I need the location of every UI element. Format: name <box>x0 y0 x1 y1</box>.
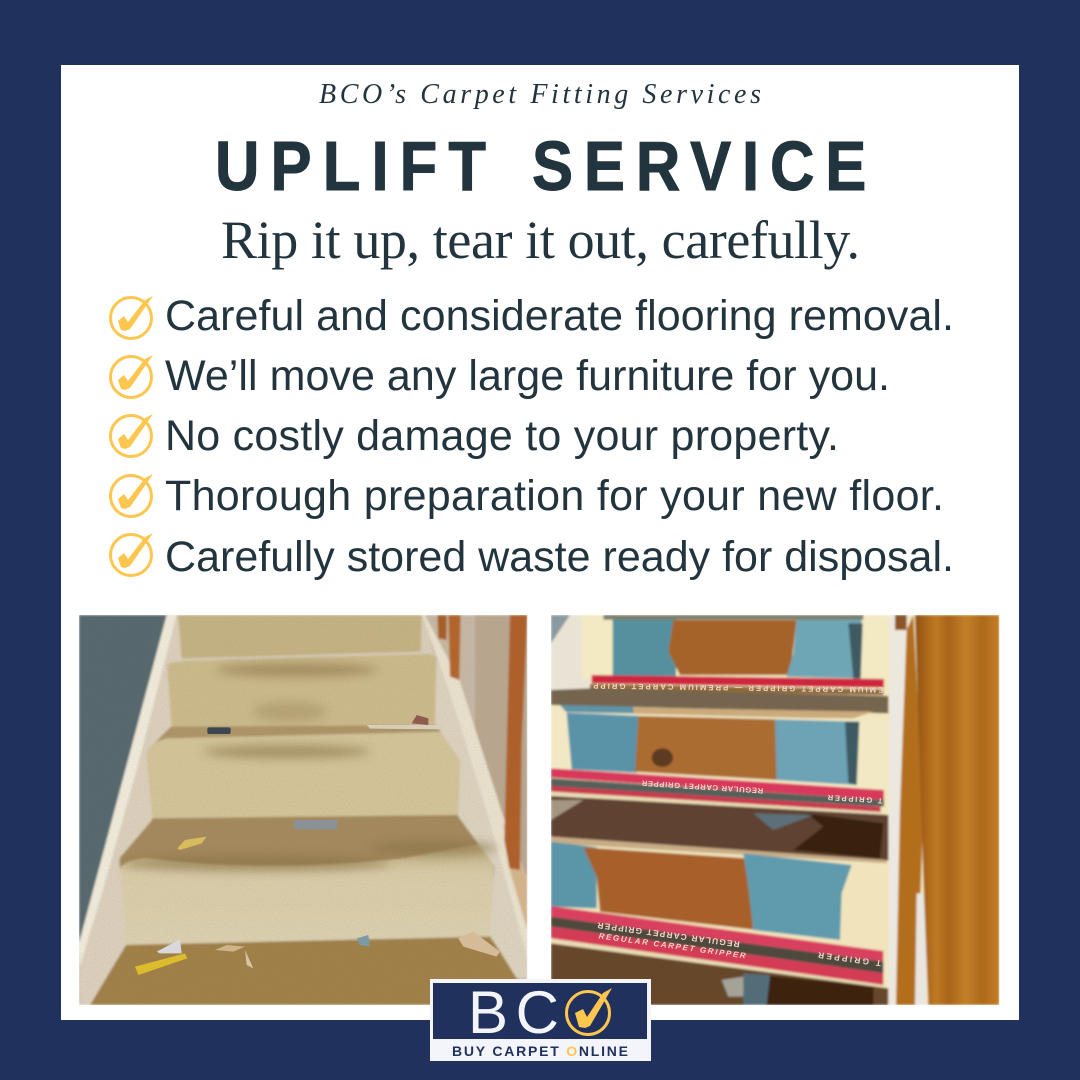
gripper labels: EMIUM CARPET GRIPPER — PREMIUM CARPET GRIPP <box>593 681 883 694</box>
logo: BCO Buy Carpet Online <box>430 979 651 1061</box>
white panel <box>61 65 1019 1020</box>
step 3 riser <box>551 842 888 958</box>
title: UPLIFT SERVICE: SERVICE <box>532 126 866 205</box>
wall skirting <box>80 615 182 1005</box>
carpet stains <box>123 663 497 871</box>
title: UPLIFT SERVICE: UPLIFT <box>215 126 486 205</box>
step 2 riser <box>566 710 794 720</box>
eyebrow: BCO's Carpet Fitting Services: BCO’s Carpet Fitting Services <box>319 79 761 110</box>
logo: BCO Buy Carpet Online: BUY CARPET ONLINE <box>452 1043 628 1059</box>
photo: stripped stairs after <box>551 615 999 1005</box>
logo: BCO Buy Carpet Online: BC <box>468 979 559 1046</box>
tread 3 <box>551 943 888 1005</box>
gripper labels: T GRIPPER <box>827 793 883 805</box>
checklist <box>110 292 954 581</box>
gripper labels: T GRIPPER <box>817 950 882 969</box>
title: UPLIFT SERVICE <box>215 126 866 205</box>
carpet texture <box>79 615 527 1005</box>
tread 1 <box>551 688 888 713</box>
item 3: No costly damage to your property. <box>165 412 839 460</box>
gripper labels <box>593 681 883 969</box>
item 4: Thorough preparation for your new floor. <box>165 472 944 520</box>
subtitle: Rip it up, tear it out, carefully. <box>221 210 860 270</box>
item 1: Careful and considerate flooring removal. <box>165 292 954 340</box>
tread 2 <box>551 796 888 861</box>
item 2: We’ll move any large furniture for you. <box>165 352 890 400</box>
photo: carpeted stairs before <box>79 615 527 1005</box>
gripper labels: REGULAR CARPET GRIPPER <box>598 931 746 960</box>
gripper labels: REGULAR CARPET GRIPPER <box>641 778 763 795</box>
gripper labels: REGULAR CARPET GRIPPER <box>597 920 740 950</box>
step 1 riser <box>582 632 590 678</box>
icon: check circle <box>566 988 612 1034</box>
item 5: Carefully stored waste ready for disposal. <box>165 533 954 581</box>
side rail <box>888 615 908 1005</box>
debris on stairs <box>135 715 500 975</box>
